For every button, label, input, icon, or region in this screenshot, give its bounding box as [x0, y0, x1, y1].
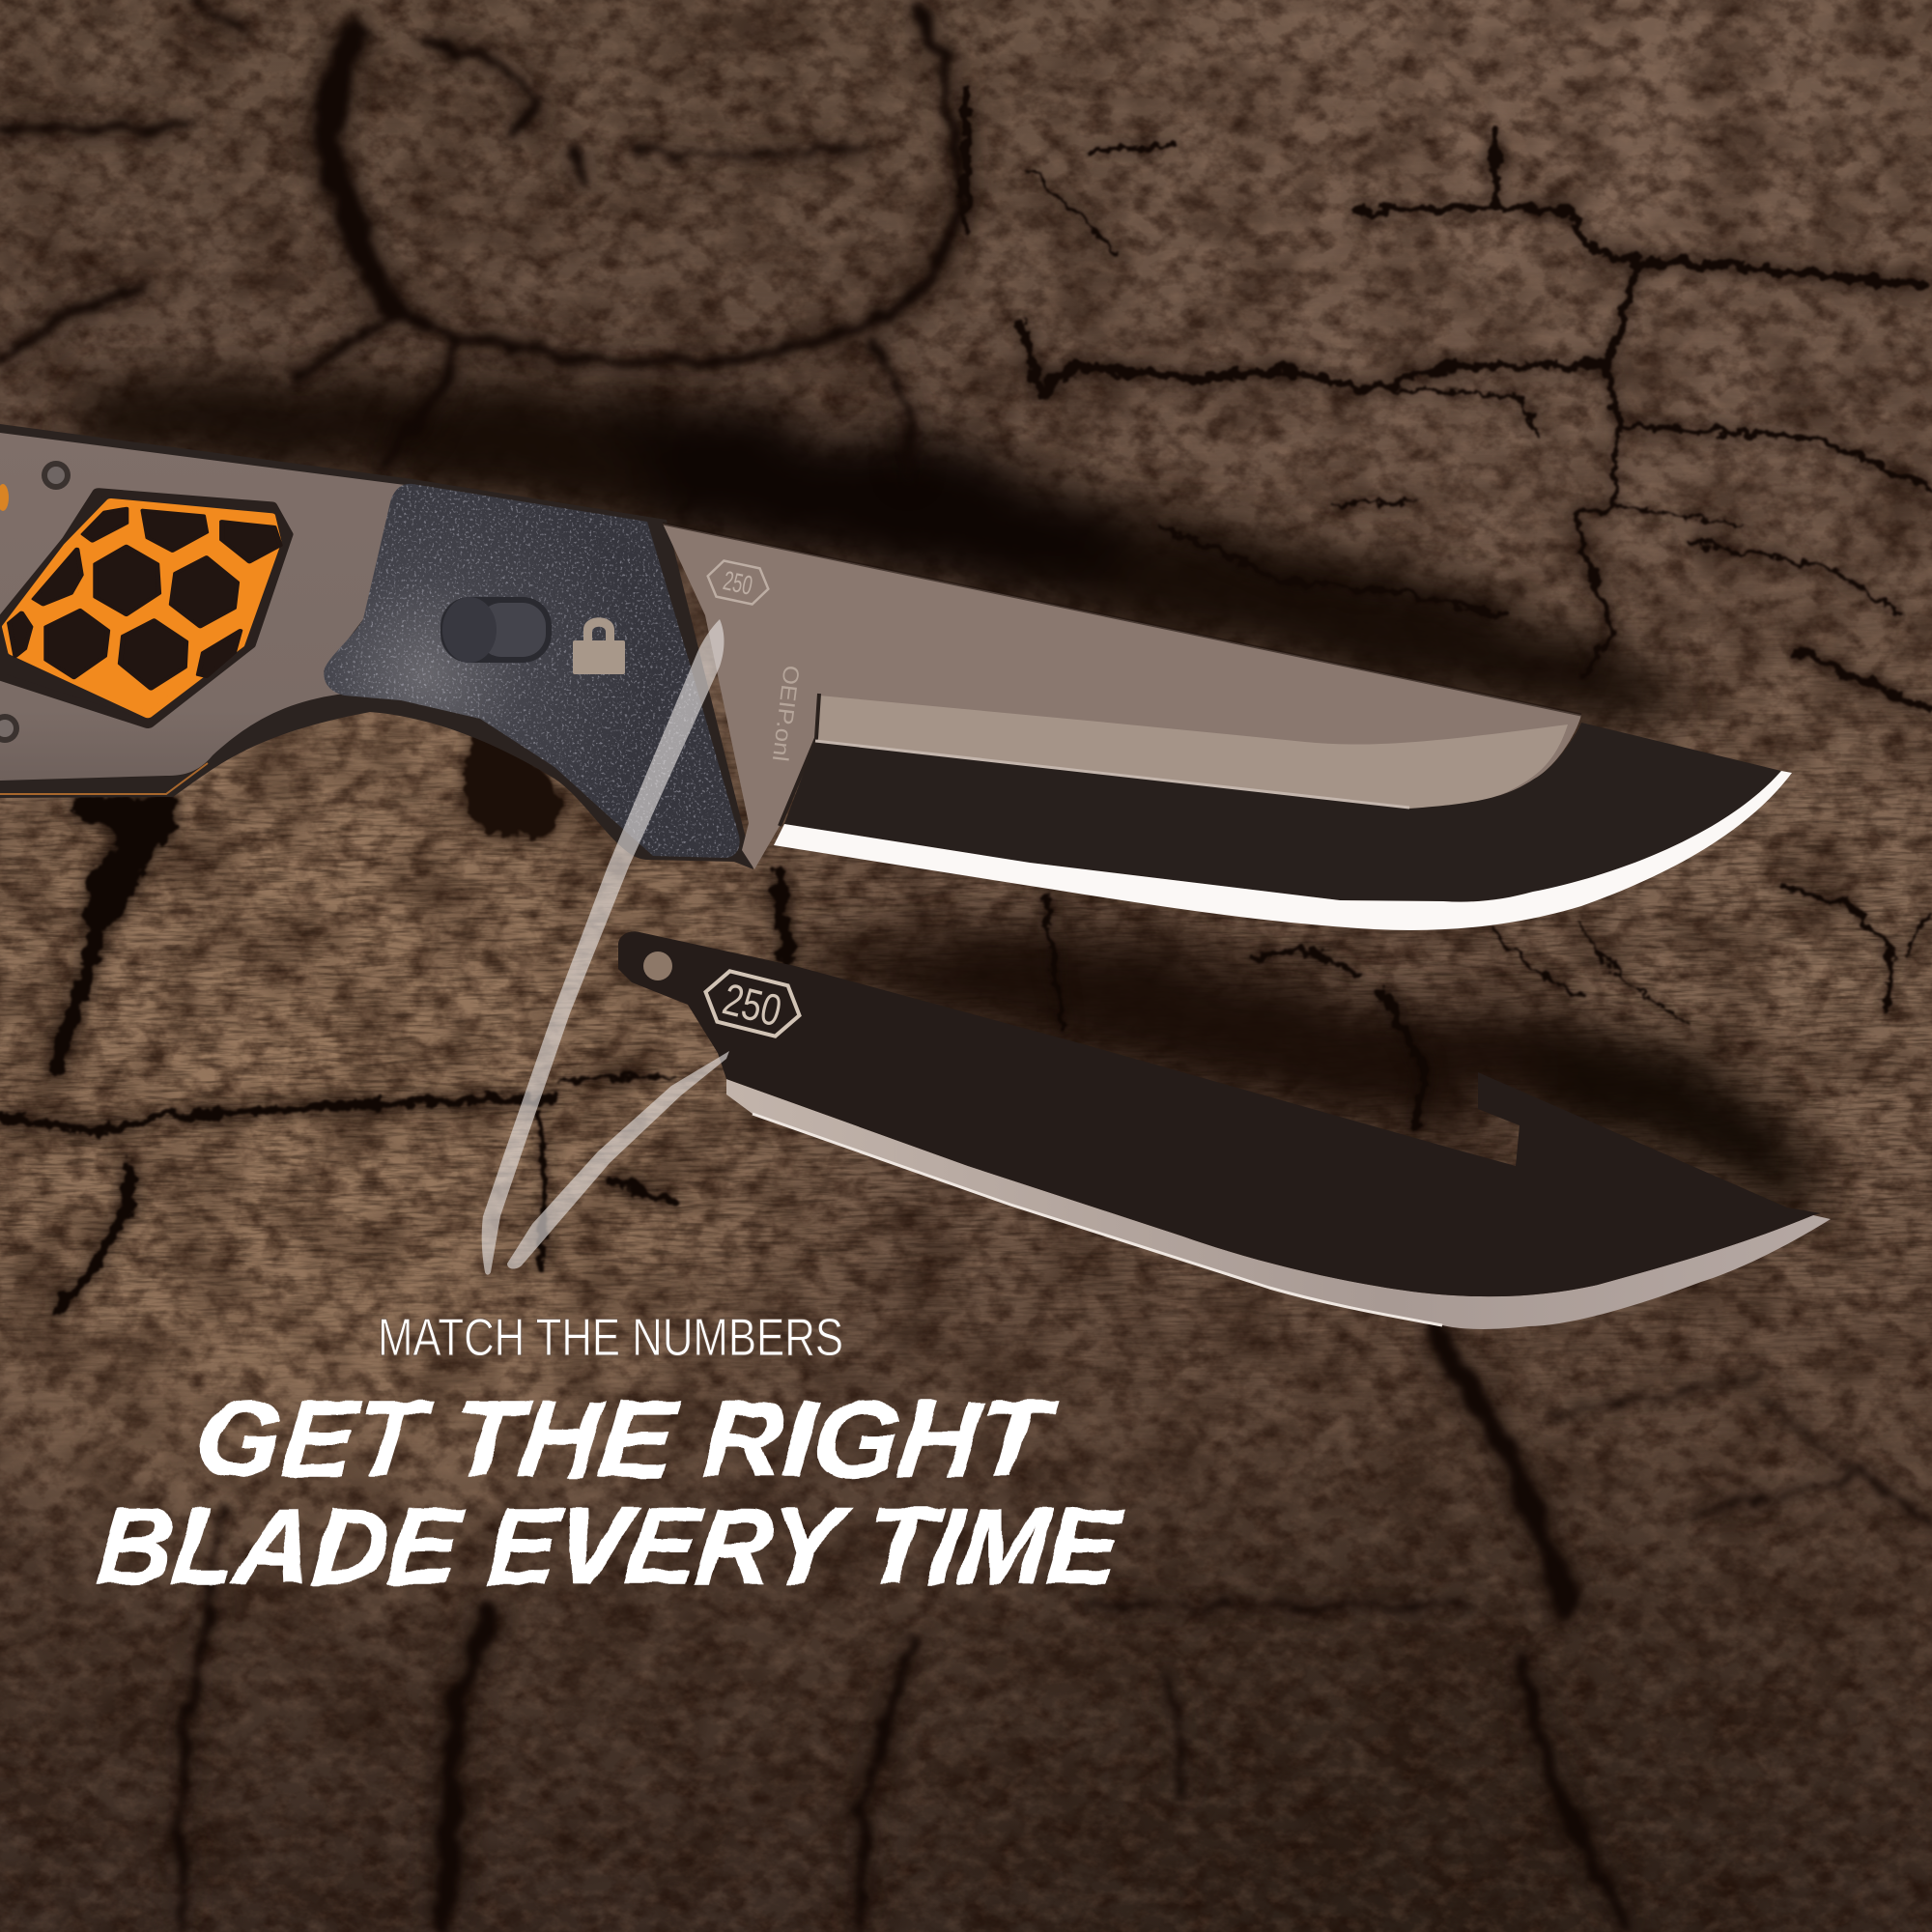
pivot rivets — [0, 461, 71, 743]
callout stroke to knife 250 mark — [482, 619, 724, 1275]
small 250 hexagon mark: 250 — [721, 565, 755, 601]
knife with installed blade — [0, 424, 1792, 930]
blade grey body and bolster — [663, 524, 1581, 869]
small 250 hexagon mark — [704, 558, 772, 607]
subheading: MATCH THE NUMBERS — [378, 1307, 843, 1367]
sharp cracks, mid band — [0, 734, 1932, 1309]
handle dark outline — [0, 424, 753, 869]
website mark on bolster: OEIP.onl — [768, 664, 805, 763]
orange honeycomb inlay — [0, 492, 287, 724]
replacement blade edge highlight — [753, 1114, 1442, 1325]
ground blade band — [815, 696, 1568, 809]
bolster blade divider — [780, 694, 819, 826]
headline line 2: BLADE EVERY TIME — [91, 1485, 1127, 1606]
blade top edge shadow — [663, 524, 1581, 715]
orange accent line on handle edge — [0, 763, 208, 794]
replacement blade — [618, 931, 1831, 1329]
headline — [91, 1378, 1127, 1606]
coating highlight line — [815, 741, 1409, 808]
black blade coating — [784, 723, 1781, 902]
replacement blade black body — [618, 931, 1821, 1296]
white cutting edge — [774, 771, 1792, 930]
headline line 1: GET THE RIGHT — [189, 1378, 1061, 1499]
padlock icon — [573, 617, 625, 674]
grip texture specks — [324, 484, 740, 858]
callout stroke to replacement blade 250 mark — [507, 1051, 729, 1269]
lock slider button — [440, 597, 552, 663]
cast shadows beneath the knife — [58, 382, 1821, 1212]
soft cracks, top — [0, 0, 961, 483]
soft cracks, bottom — [179, 1329, 1932, 1926]
tang hole — [643, 952, 672, 980]
textured dark grip — [324, 484, 740, 858]
replacement blade white edge — [726, 1079, 1831, 1329]
250 hexagon mark: 250 — [718, 973, 786, 1036]
handle grey scale — [0, 433, 412, 781]
sharp cracks, upper right — [966, 87, 1932, 710]
